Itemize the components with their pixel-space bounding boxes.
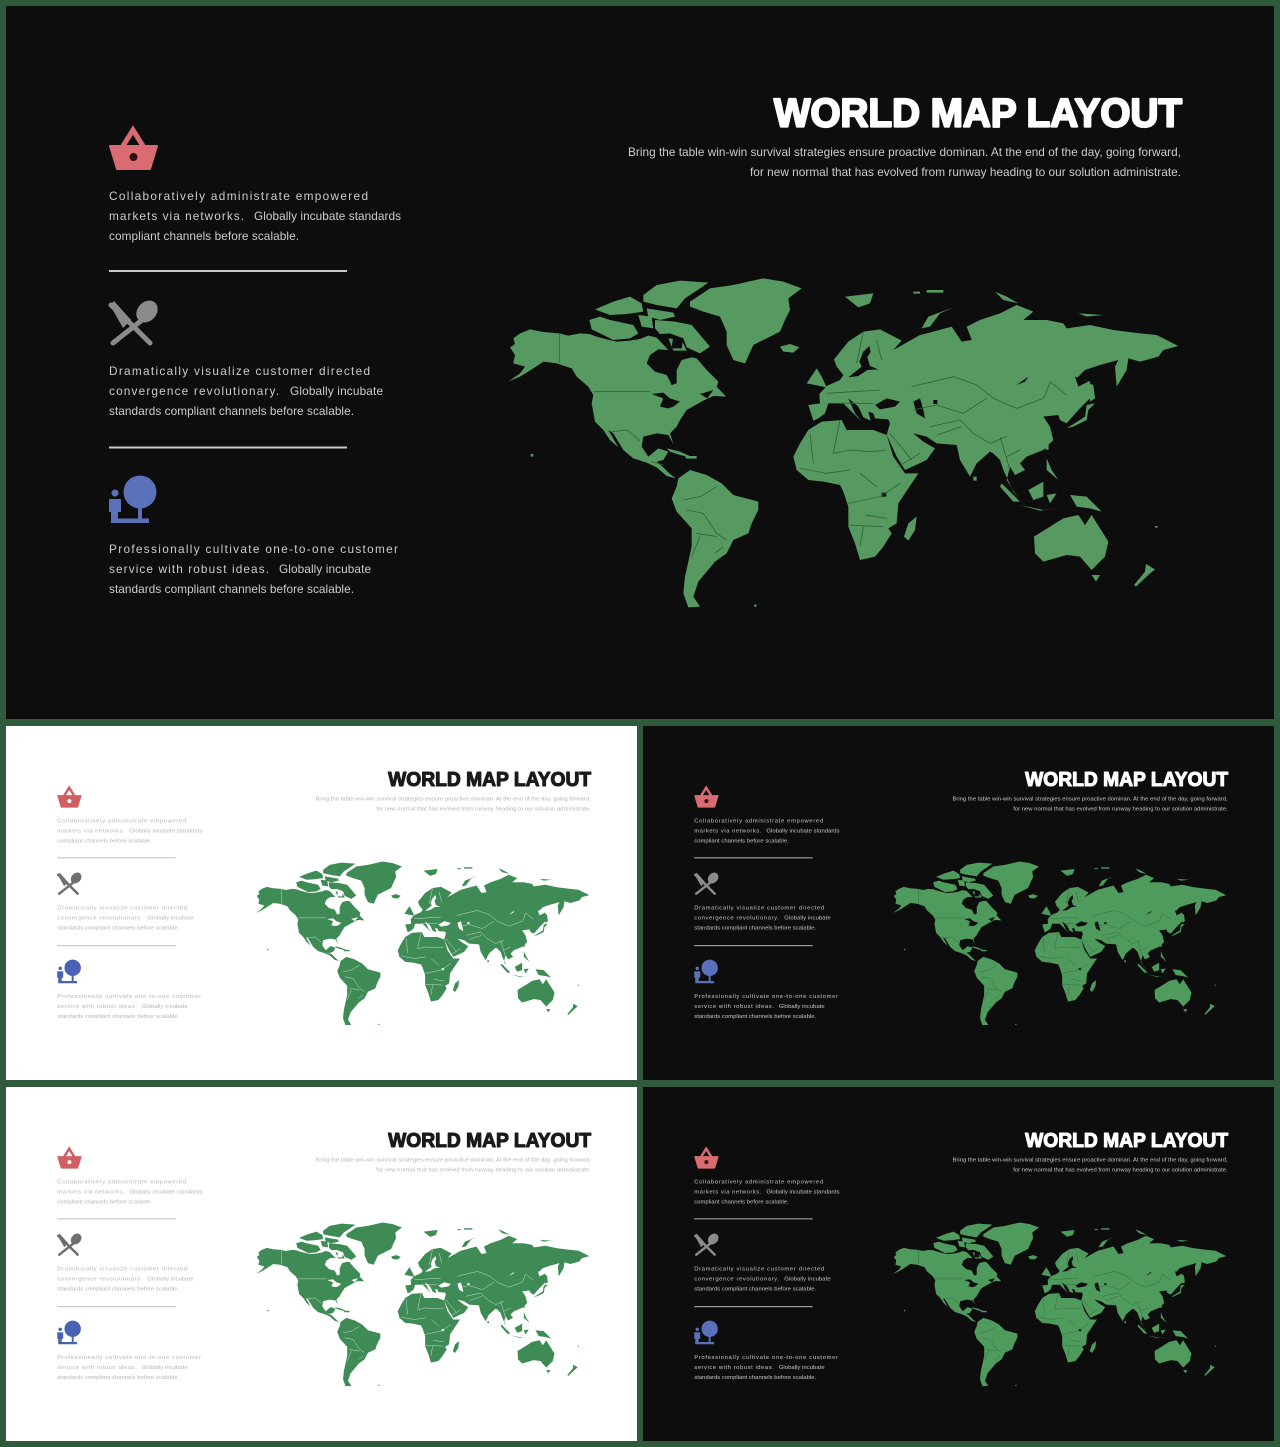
text block: dramatically: convergence revolutionary. bbox=[694, 916, 779, 922]
panel: dark slide bottom-right bbox=[643, 1087, 1274, 1441]
text block: collaboratively: compliant channels before scalable. bbox=[109, 229, 299, 243]
text block: dramatically: standards compliant channels before scalable. bbox=[694, 926, 817, 932]
text block: dramatically: Dramatically visualize customer directed bbox=[109, 364, 370, 378]
subtitle: Bring the table win-win survival strategies ensure proactive dominan. At the end of the day, going forward, bbox=[315, 797, 591, 803]
world map bbox=[893, 861, 1226, 1025]
panel: light slide top-left bbox=[6, 726, 637, 1080]
text block: dramatically bbox=[57, 906, 194, 932]
icon: person and tree bbox=[109, 476, 156, 523]
text block: dramatically: Dramatically visualize customer directed bbox=[694, 1267, 824, 1273]
text block: professionally: service with robust ideas. bbox=[109, 562, 269, 576]
icon: basket bbox=[695, 1149, 718, 1168]
text block: dramatically: convergence revolutionary. bbox=[694, 1277, 779, 1283]
text block: dramatically bbox=[694, 1267, 831, 1293]
text block: collaboratively bbox=[694, 1180, 840, 1205]
text block: collaboratively bbox=[109, 189, 401, 243]
icon: person and tree bbox=[57, 1321, 81, 1344]
text block: professionally: Professionally cultivate one-to-one customer bbox=[57, 1355, 201, 1361]
icon: person and tree bbox=[694, 960, 718, 983]
text block: dramatically: convergence revolutionary. bbox=[57, 1277, 142, 1283]
text block: dramatically: convergence revolutionary. bbox=[57, 916, 142, 922]
text block: collaboratively: Collaboratively administrate empowered bbox=[57, 1180, 186, 1186]
icon: basket bbox=[58, 1149, 81, 1168]
title: WORLD MAP LAYOUT bbox=[388, 1130, 591, 1152]
text block: professionally: Globally incubate bbox=[142, 1004, 188, 1010]
text block: professionally bbox=[109, 542, 398, 596]
text block: professionally: standards compliant channels before scalable. bbox=[57, 1375, 180, 1381]
subtitle: Bring the table win-win survival strategies ensure proactive dominan. At the end of the day, going forward, bbox=[315, 1158, 591, 1164]
icon: basket bbox=[110, 130, 157, 169]
text block: professionally: standards compliant channels before scalable. bbox=[57, 1014, 180, 1020]
text block: collaboratively: Collaboratively administrate empowered bbox=[694, 1180, 823, 1186]
panel: main dark slide bbox=[6, 6, 1274, 719]
text block: professionally bbox=[694, 1355, 838, 1381]
world map bbox=[893, 1222, 1226, 1386]
text block: dramatically: Globally incubate bbox=[147, 916, 194, 922]
icon: knife and spoon bbox=[695, 870, 721, 894]
text block: collaboratively: markets via networks. bbox=[57, 828, 125, 834]
icon: knife and spoon bbox=[110, 296, 162, 343]
subtitle bbox=[628, 145, 1181, 179]
text block: dramatically: Globally incubate bbox=[147, 1277, 194, 1283]
text block: collaboratively: Collaboratively administrate empowered bbox=[57, 819, 186, 825]
text block: dramatically: standards compliant channels before scalable. bbox=[57, 926, 180, 932]
title: WORLD MAP LAYOUT bbox=[1025, 1130, 1228, 1152]
panel: light slide bottom-left bbox=[6, 1087, 637, 1441]
panel: dark slide top-right bbox=[643, 726, 1274, 1080]
text block: dramatically: Globally incubate bbox=[784, 1277, 831, 1283]
text block: collaboratively: markets via networks. bbox=[694, 828, 762, 834]
text block: collaboratively: markets via networks. bbox=[694, 1189, 762, 1195]
title: WORLD MAP LAYOUT bbox=[1025, 769, 1228, 791]
text block: collaboratively bbox=[57, 1180, 203, 1205]
text block: professionally bbox=[57, 1355, 201, 1381]
icon: basket bbox=[58, 788, 81, 807]
text block: professionally: service with robust ideas. bbox=[694, 1365, 774, 1371]
text block: collaboratively bbox=[57, 819, 203, 844]
text block: collaboratively: compliant channels before scalable. bbox=[694, 1199, 789, 1205]
text block: professionally: standards compliant channels before scalable. bbox=[109, 582, 354, 596]
text block: dramatically: standards compliant channels before scalable. bbox=[109, 404, 354, 418]
text block: collaboratively: Globally incubate standards bbox=[254, 209, 401, 223]
text block: collaboratively: Globally incubate standards bbox=[766, 1189, 840, 1195]
world map bbox=[256, 861, 589, 1025]
text block: collaboratively: compliant channels before scalable. bbox=[57, 838, 152, 844]
text block: collaboratively: Globally incubate standards bbox=[129, 828, 203, 834]
text block: dramatically: Dramatically visualize customer directed bbox=[57, 1267, 187, 1273]
icon: person and tree bbox=[57, 960, 81, 983]
world map bbox=[508, 278, 1178, 607]
title: WORLD MAP LAYOUT bbox=[774, 92, 1182, 136]
text block: collaboratively: Collaboratively administrate empowered bbox=[694, 819, 823, 825]
text block: professionally: Globally incubate bbox=[142, 1365, 188, 1371]
subtitle bbox=[952, 1158, 1228, 1174]
text block: collaboratively bbox=[694, 819, 840, 844]
world map bbox=[256, 1222, 589, 1386]
text block: collaboratively: Globally incubate standards bbox=[766, 828, 840, 834]
icon: knife and spoon bbox=[58, 1231, 84, 1255]
text block: collaboratively: markets via networks. bbox=[109, 209, 244, 223]
text block: collaboratively: Collaboratively administrate empowered bbox=[109, 189, 368, 203]
text block: collaboratively: markets via networks. bbox=[57, 1189, 125, 1195]
text block: professionally: Professionally cultivate one-to-one customer bbox=[694, 994, 838, 1000]
text block: professionally: service with robust ideas. bbox=[57, 1365, 137, 1371]
text block: dramatically bbox=[109, 364, 383, 418]
icon: basket bbox=[695, 788, 718, 807]
text block: professionally: Professionally cultivate one-to-one customer bbox=[694, 1355, 838, 1361]
text block: professionally: service with robust ideas. bbox=[694, 1004, 774, 1010]
text block: collaboratively: Globally incubate standards bbox=[129, 1189, 203, 1195]
title: WORLD MAP LAYOUT bbox=[388, 769, 591, 791]
text block: collaboratively: compliant channels before scalable. bbox=[694, 838, 789, 844]
icon: knife and spoon bbox=[58, 870, 84, 894]
subtitle bbox=[952, 797, 1228, 813]
subtitle: for new normal that has evolved from runway heading to our solution administrate. bbox=[750, 165, 1181, 179]
text block: dramatically: standards compliant channels before scalable. bbox=[694, 1287, 817, 1293]
subtitle: for new normal that has evolved from runway heading to our solution administrate. bbox=[376, 1168, 591, 1174]
subtitle: for new normal that has evolved from runway heading to our solution administrate. bbox=[1013, 1168, 1228, 1174]
text block: dramatically: Globally incubate bbox=[290, 384, 383, 398]
subtitle: for new normal that has evolved from runway heading to our solution administrate. bbox=[1013, 807, 1228, 813]
text block: professionally: Globally incubate bbox=[779, 1004, 825, 1010]
subtitle: Bring the table win-win survival strategies ensure proactive dominan. At the end of the day, going forward, bbox=[628, 145, 1181, 159]
subtitle bbox=[315, 1158, 591, 1174]
text block: professionally: Professionally cultivate one-to-one customer bbox=[57, 994, 201, 1000]
text block: collaboratively: compliant channels before scalable. bbox=[57, 1199, 152, 1205]
subtitle: Bring the table win-win survival strategies ensure proactive dominan. At the end of the day, going forward, bbox=[952, 1158, 1228, 1164]
icon: person and tree bbox=[694, 1321, 718, 1344]
text block: professionally: Globally incubate bbox=[279, 562, 371, 576]
text block: professionally: standards compliant channels before scalable. bbox=[694, 1375, 817, 1381]
text block: professionally: Professionally cultivate one-to-one customer bbox=[109, 542, 398, 556]
text block: professionally: Globally incubate bbox=[779, 1365, 825, 1371]
icon: knife and spoon bbox=[695, 1231, 721, 1255]
text block: dramatically: Dramatically visualize customer directed bbox=[57, 906, 187, 912]
subtitle: for new normal that has evolved from runway heading to our solution administrate. bbox=[376, 807, 591, 813]
text block: professionally bbox=[694, 994, 838, 1020]
text block: dramatically: Globally incubate bbox=[784, 916, 831, 922]
text block: professionally: standards compliant channels before scalable. bbox=[694, 1014, 817, 1020]
text block: professionally: service with robust ideas. bbox=[57, 1004, 137, 1010]
text block: dramatically: standards compliant channels before scalable. bbox=[57, 1287, 180, 1293]
text block: dramatically: convergence revolutionary. bbox=[109, 384, 279, 398]
text block: professionally bbox=[57, 994, 201, 1020]
subtitle: Bring the table win-win survival strategies ensure proactive dominan. At the end of the day, going forward, bbox=[952, 797, 1228, 803]
text block: dramatically bbox=[694, 906, 831, 932]
subtitle bbox=[315, 797, 591, 813]
text block: dramatically: Dramatically visualize customer directed bbox=[694, 906, 824, 912]
text block: dramatically bbox=[57, 1267, 194, 1293]
